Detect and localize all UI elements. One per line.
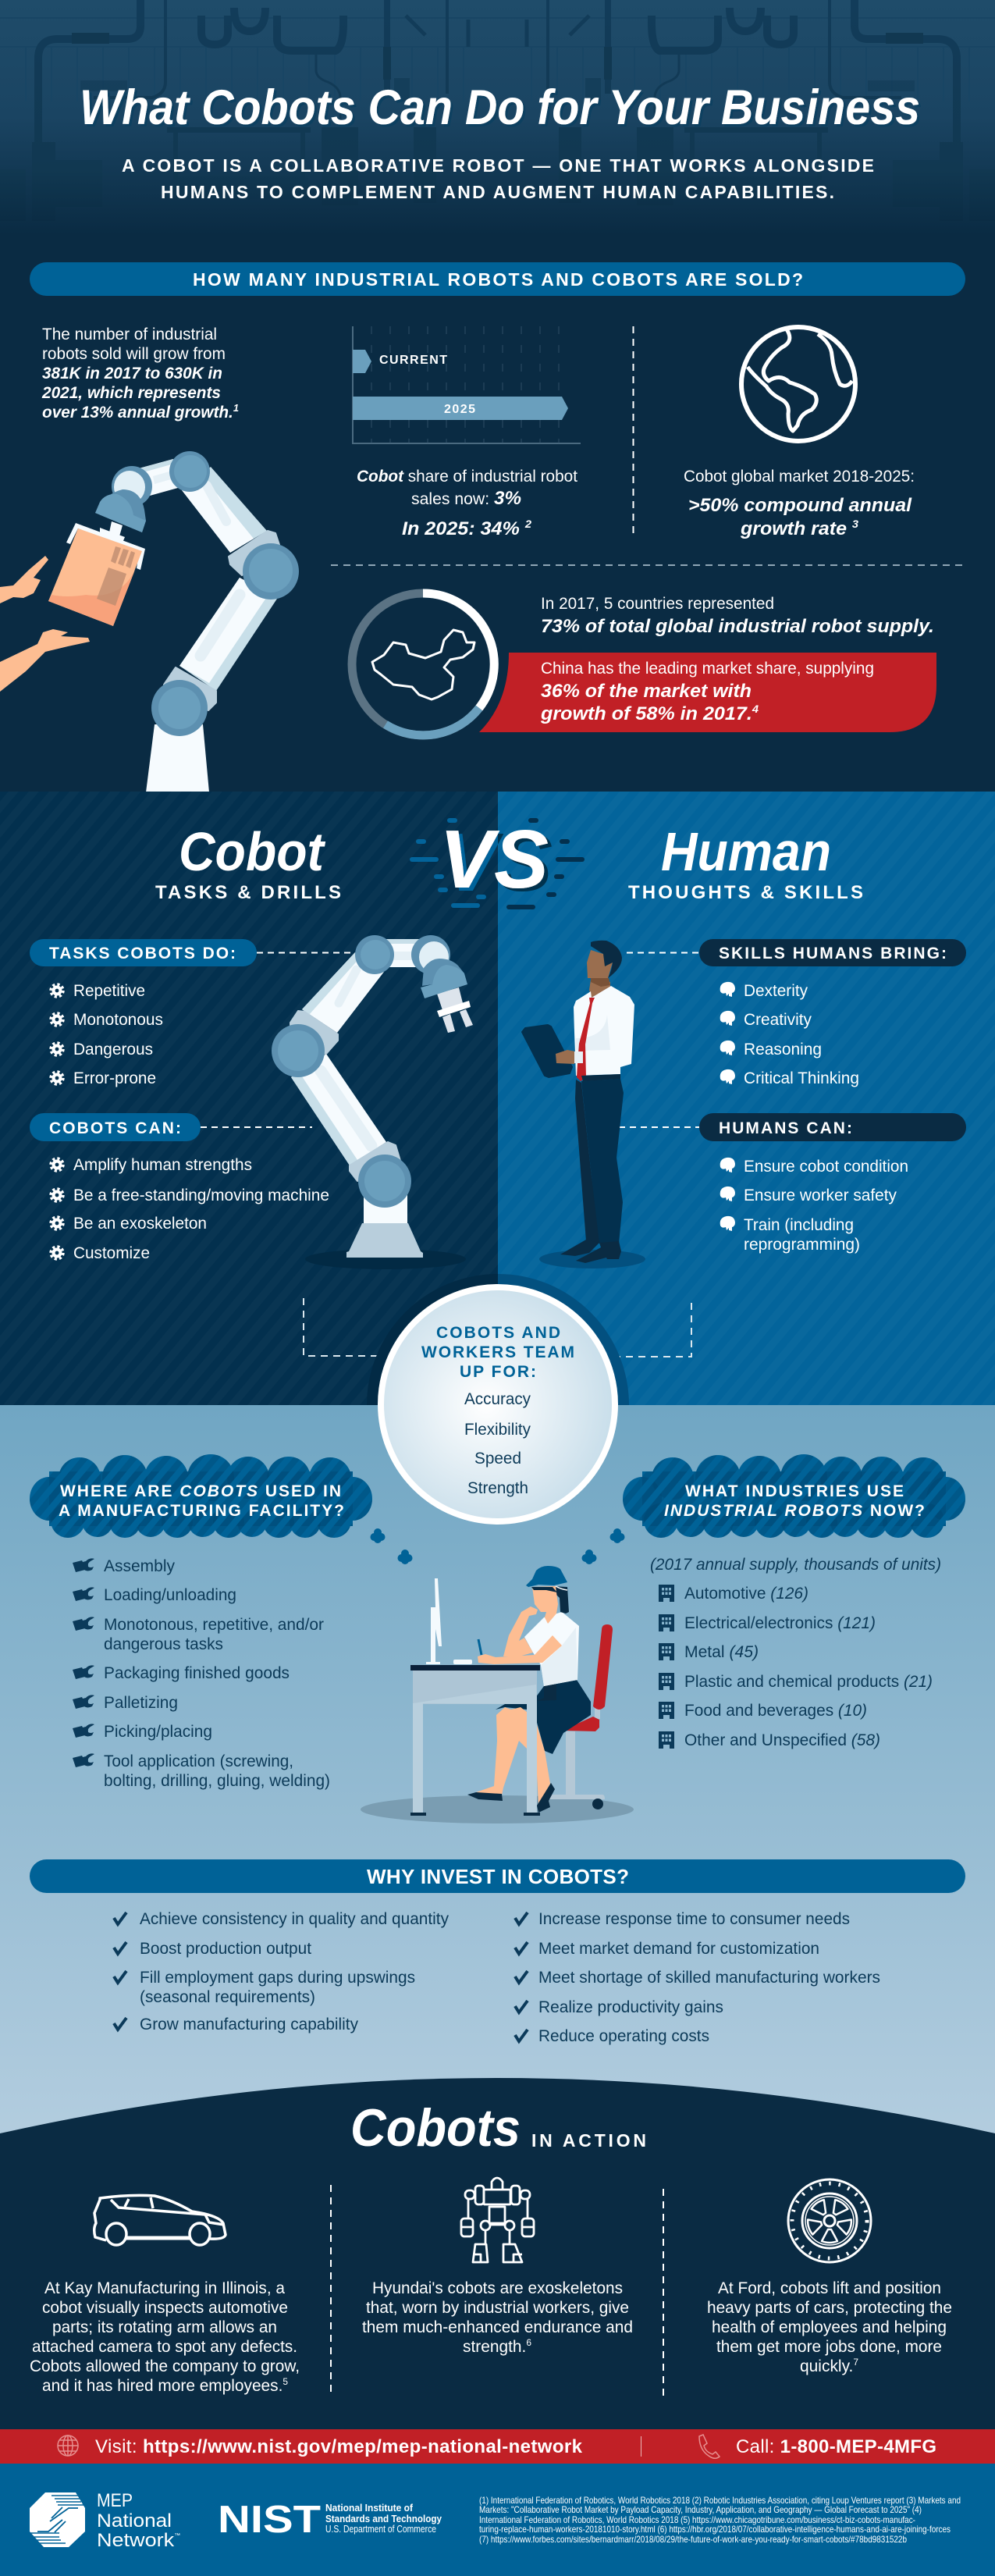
callout: China market share: China has the leading market share, supplying — [541, 660, 874, 678]
text: cobot share: In 2025: 34% — [402, 518, 514, 539]
text: cobot share: sales now: 3% — [411, 488, 521, 509]
list: why invest left column: (seasonal requirements) — [140, 1988, 315, 2006]
list: cobots can: Be a free-standing/moving machine — [73, 1187, 329, 1204]
pill: skills humans bring — [627, 939, 966, 966]
chart: cobot share bars: 2025 — [444, 403, 475, 416]
text: robot sales growth: 2021, which represents — [41, 384, 221, 402]
list: cobots can: Customize — [73, 1244, 150, 1262]
list: where cobots are used: Assembly — [104, 1557, 175, 1575]
callout: cobots and workers team up for: Strength — [467, 1479, 528, 1497]
list: why invest right column: Meet market demand for customization — [538, 1940, 819, 1958]
gripper dome — [95, 489, 146, 532]
shirt — [574, 986, 634, 1076]
arms — [503, 1606, 538, 1656]
illustration: cobot robot arm — [272, 935, 473, 1269]
text: Hyundai: that, worn by industrial workers, give — [366, 2299, 629, 2317]
list: skills humans bring: Critical Thinking — [744, 1069, 859, 1087]
dashed connector right — [609, 1303, 691, 1357]
thought cloud: where are cobots used — [30, 1454, 412, 1564]
list: where cobots are used: Tool application (screwing, — [104, 1752, 293, 1770]
list: humans can — [720, 1158, 908, 1254]
contact bar — [0, 2429, 995, 2464]
text: Hyundai: Hyundai's cobots are exoskeletons — [372, 2279, 623, 2297]
list: tasks cobots do: Error-prone — [73, 1069, 156, 1087]
list: where cobots are used: bolting, drilling, gluing, welding) — [104, 1772, 330, 1790]
list: humans can: Train (including — [744, 1216, 854, 1234]
list: why invest left column — [114, 1910, 449, 2033]
text: Kay Manufacturing: 5 — [283, 2376, 288, 2387]
thought cloud: what industries use robots: WHAT INDUSTRIES USE — [685, 1482, 904, 1500]
text: Kay Manufacturing: parts; its rotating arm allows an — [52, 2318, 277, 2336]
text: Hyundai — [362, 2279, 633, 2356]
list: industries using robots: Automotive (126) — [684, 1585, 808, 1603]
chart: donut with China map — [352, 593, 494, 735]
callout: China market share: 36% of the market with — [541, 681, 752, 702]
list: where cobots are used: dangerous tasks — [104, 1635, 223, 1653]
text: Ford: At Ford, cobots lift and position — [718, 2279, 941, 2297]
banner: how many robots sold — [30, 262, 965, 296]
list: why invest right column — [515, 1910, 880, 2045]
callout: China market share: 4 — [752, 703, 759, 715]
hair and face — [553, 1586, 569, 1614]
logo: MEP National Network — [30, 2490, 180, 2551]
logo: MEP National Network: National — [97, 2510, 172, 2532]
list: why invest left column: Achieve consistency in quality and quantity — [140, 1910, 449, 1928]
list: why invest right column: Meet shortage of skilled manufacturing workers — [538, 1969, 880, 1987]
header factory backdrop — [0, 0, 995, 234]
neck — [589, 980, 610, 998]
panel: human side — [498, 792, 995, 1405]
list: cobots can — [51, 1156, 329, 1262]
text: robot sales growth — [41, 326, 239, 422]
thought cloud: what industries use robots: INDUSTRIAL ROBOTS NOW? — [664, 1502, 925, 1520]
heading: VS with sparks: VS — [439, 813, 549, 906]
list: skills humans bring: Reasoning — [744, 1041, 822, 1059]
callout: China market share — [479, 653, 936, 732]
list: tasks cobots do: Dangerous — [73, 1041, 153, 1059]
list: why invest right column: Realize productivity gains — [538, 1998, 723, 2016]
text: Kay Manufacturing: attached camera to spot any defects. — [32, 2338, 297, 2356]
illustration: woman thinking at desk — [361, 1566, 634, 1823]
list: why invest right column: Reduce operating costs — [538, 2027, 709, 2045]
heading: cobot: Cobot — [179, 821, 325, 882]
text: Hyundai: them much-enhanced endurance and — [362, 2318, 633, 2336]
references: International Federation of Robotics, World Robotics 2018 (5) https://www.chicagotribune.com/business/ct-biz-cobots-manufac- — [479, 2514, 915, 2525]
list: why invest left column: Boost production output — [140, 1940, 311, 1958]
list: why invest left column: Grow manufacturing capability — [140, 2016, 358, 2033]
banner: how many robots sold: HOW MANY INDUSTRIAL ROBOTS AND COBOTS ARE SOLD? — [193, 269, 803, 290]
heading: human: THOUGHTS & SKILLS — [628, 882, 863, 903]
banner: why invest in cobots — [30, 1859, 965, 1893]
icon: wheel — [788, 2179, 871, 2262]
heading: cobots in action: IN ACTION — [531, 2130, 646, 2151]
monitor — [426, 1578, 442, 1664]
text: cobot share: Cobot share of industrial robot — [357, 468, 577, 486]
icon: web globe — [58, 2435, 78, 2456]
title: What Cobots Can Do for Your Business — [80, 80, 920, 135]
text: global supply: In 2017, 5 countries represented — [541, 595, 774, 613]
list: skills humans bring — [720, 982, 859, 1087]
text: Kay Manufacturing: Cobots allowed the company to grow, — [30, 2357, 300, 2375]
chart: cobot share bars — [353, 326, 581, 443]
callout: cobots and workers team up for: Accuracy — [464, 1390, 531, 1408]
text: global market: 3 — [852, 518, 858, 530]
list: humans can: reprogramming) — [744, 1236, 860, 1254]
shirt — [524, 1612, 579, 1686]
text: global supply — [541, 595, 934, 637]
heading: human: Human — [661, 821, 831, 882]
list: cobots can: Be an exoskeleton — [73, 1215, 207, 1233]
shoes — [560, 1240, 599, 1256]
text: Kay Manufacturing — [30, 2279, 300, 2395]
callout: cobots and workers team up for: COBOTS AND — [436, 1324, 560, 1342]
dashed divider — [331, 564, 962, 566]
panel: cobot side — [0, 792, 498, 1405]
icon: car — [94, 2195, 226, 2245]
pill: tasks cobots do — [30, 939, 355, 966]
text: robot sales growth: robots sold will grow from — [42, 345, 226, 363]
text: cobot share: 2 — [524, 518, 531, 530]
list: tasks cobots do: Repetitive — [73, 982, 145, 1000]
chart: cobot share bars: CURRENT — [379, 354, 447, 367]
logo: NIST — [218, 2499, 442, 2541]
text: Ford: 7 — [853, 2357, 858, 2368]
text: global market — [684, 468, 915, 539]
logo: MEP National Network: MEP — [97, 2490, 133, 2511]
desk — [413, 1670, 537, 1704]
thought cloud: where are cobots used: A MANUFACTURING FACILITY? — [59, 1502, 344, 1520]
list: where cobots are used — [73, 1557, 330, 1790]
thought cloud: what industries use robots — [582, 1454, 965, 1564]
banner: why invest in cobots: WHY INVEST IN COBOTS? — [367, 1865, 629, 1888]
front leg — [476, 1707, 527, 1795]
list: industries using robots: Electrical/electronics (121) — [684, 1614, 876, 1632]
gripper — [437, 987, 463, 1010]
heading: cobots in action — [350, 2098, 646, 2158]
skirt — [496, 1680, 591, 1754]
list: humans can: Ensure cobot condition — [744, 1158, 908, 1176]
chair — [566, 1731, 575, 1795]
logo: NIST: NIST — [218, 2499, 321, 2541]
list: why invest left column: Fill employment gaps during upswings — [140, 1969, 415, 1987]
footer panel — [0, 2464, 995, 2576]
list: where cobots are used: Packaging finished goods — [104, 1664, 290, 1682]
callout: cobots and workers team up for: WORKERS TEAM — [421, 1343, 574, 1361]
heading: human — [628, 821, 863, 903]
list: skills humans bring: Creativity — [744, 1011, 812, 1029]
text: global supply: 73% of total global industrial robot supply. — [541, 616, 934, 637]
logo: NIST: Standards and Technology — [325, 2513, 442, 2524]
icon: exoskeleton robot — [461, 2178, 534, 2262]
pill: humans can: HUMANS CAN: — [719, 1119, 852, 1137]
text: Hyundai: strength. — [463, 2338, 527, 2356]
icon: China outline — [372, 630, 474, 699]
trousers — [575, 1080, 601, 1244]
text: Ford: quickly. — [800, 2357, 853, 2375]
list: cobots can: Amplify human strengths — [73, 1156, 252, 1174]
list: where cobots are used: Palletizing — [104, 1694, 178, 1712]
list: industries using robots: Other and Unspecified (58) — [684, 1731, 880, 1749]
subtitle: HUMANS TO COMPLEMENT AND AUGMENT HUMAN CAPABILITIES. — [161, 182, 834, 202]
panel: cobots in action — [0, 2078, 995, 2429]
callout: cobots and workers team up for: Flexibility — [464, 1421, 531, 1439]
pill: tasks cobots do: TASKS COBOTS DO: — [49, 945, 236, 962]
pill: humans can — [619, 1113, 966, 1141]
thought cloud: where are cobots used: WHERE ARE COBOTS USED IN — [60, 1482, 341, 1500]
illustration: robot arm holding box with human hands — [0, 451, 299, 792]
list: industries using robots: Metal (45) — [684, 1643, 759, 1661]
contact bar: Call: 1-800-MEP-4MFG — [736, 2436, 936, 2457]
back leg — [521, 1725, 550, 1806]
list: industries using robots: Plastic and chemical products (21) — [684, 1673, 933, 1691]
references — [479, 2495, 961, 2545]
list: tasks cobots do — [51, 982, 163, 1087]
callout: cobots and workers team up for: Speed — [474, 1450, 521, 1468]
logo: NIST: National Institute of — [325, 2502, 414, 2514]
heading: cobot — [155, 821, 341, 903]
text: robot sales growth: over 13% annual growth. — [42, 404, 235, 422]
panel: lower light section — [0, 1405, 995, 2139]
text: cobot share — [357, 468, 577, 539]
text: Hyundai: 6 — [526, 2337, 531, 2348]
dashed divider — [632, 326, 634, 535]
face and hair — [587, 950, 613, 978]
callout: China market share: growth of 58% in 2017. — [541, 703, 743, 724]
text: Ford — [707, 2279, 952, 2375]
text: robot sales growth: 1 — [233, 402, 239, 414]
hard hat — [526, 1566, 567, 1587]
list: industries using robots: (2017 annual supply, thousands of units) — [650, 1556, 941, 1574]
list: skills humans bring: Dexterity — [744, 982, 808, 1000]
dashed connector left — [304, 1298, 381, 1356]
subtitle — [122, 155, 874, 202]
illustration: man with clipboard — [522, 941, 645, 1268]
clipboard — [522, 1025, 572, 1077]
list: why invest right column: Increase response time to consumer needs — [538, 1910, 850, 1928]
heading: cobot: TASKS & DRILLS — [155, 882, 341, 903]
references: (7) https://www.forbes.com/sites/bernardmarr/2018/08/29/the-future-of-work-are-you-ready-for-smart-cobots/#78bd9831522b — [479, 2534, 907, 2545]
bar: current — [353, 350, 371, 373]
heading: VS with sparks — [410, 813, 585, 909]
list: tasks cobots do: Monotonous — [73, 1011, 163, 1029]
pill: skills humans bring: SKILLS HUMANS BRING: — [719, 945, 947, 962]
callout: cobots and workers team up for: UP FOR: — [460, 1363, 536, 1381]
text: Ford: health of employees and helping — [712, 2318, 947, 2336]
text: Ford: them get more jobs done, more — [716, 2338, 942, 2356]
text: global market: Cobot global market 2018-2025: — [684, 468, 915, 486]
hands — [0, 556, 48, 603]
text: global market: >50% compound annual — [688, 495, 912, 516]
robot base — [146, 724, 209, 792]
box — [48, 528, 142, 626]
text: Kay Manufacturing: At Kay Manufacturing in Illinois, a — [44, 2279, 285, 2297]
text: global market: growth rate — [741, 518, 843, 539]
list: where cobots are used: Loading/unloading — [104, 1586, 236, 1604]
subtitle: A COBOT IS A COLLABORATIVE ROBOT — ONE THAT WORKS ALONGSIDE — [122, 155, 874, 176]
icon: globe — [741, 327, 855, 441]
list: where cobots are used: Monotonous, repetitive, and/or — [104, 1616, 324, 1634]
dashed divider — [663, 2189, 664, 2400]
heading: cobots in action: Cobots — [350, 2098, 521, 2158]
icon: phone — [699, 2435, 720, 2458]
text: Kay Manufacturing: cobot visually inspects automotive — [42, 2299, 288, 2317]
callout: cobots and workers team up for — [367, 1274, 629, 1521]
dashed divider — [330, 2185, 332, 2396]
text: robot sales growth: 381K in 2017 to 630K in — [42, 365, 222, 382]
pill: cobots can — [30, 1113, 312, 1141]
pill: cobots can: COBOTS CAN: — [49, 1119, 181, 1137]
logo: MEP National Network: Network — [97, 2530, 165, 2551]
logo: NIST: U.S. Department of Commerce — [325, 2523, 436, 2535]
list: humans can: Ensure worker safety — [744, 1187, 897, 1204]
list: where cobots are used: Picking/placing — [104, 1723, 212, 1741]
text: robot sales growth: The number of industrial — [42, 326, 217, 343]
list: industries using robots: Food and beverages (10) — [684, 1702, 867, 1720]
list: industries using robots — [650, 1556, 941, 1749]
bar: 2025 — [353, 397, 568, 420]
contact bar: Visit: https://www.nist.gov/mep/mep-national-network — [95, 2436, 583, 2457]
text: Kay Manufacturing: and it has hired more employees. — [42, 2377, 284, 2395]
text: Ford: heavy parts of cars, protecting the — [707, 2299, 952, 2317]
logo: MEP National Network: ™ — [174, 2533, 180, 2539]
